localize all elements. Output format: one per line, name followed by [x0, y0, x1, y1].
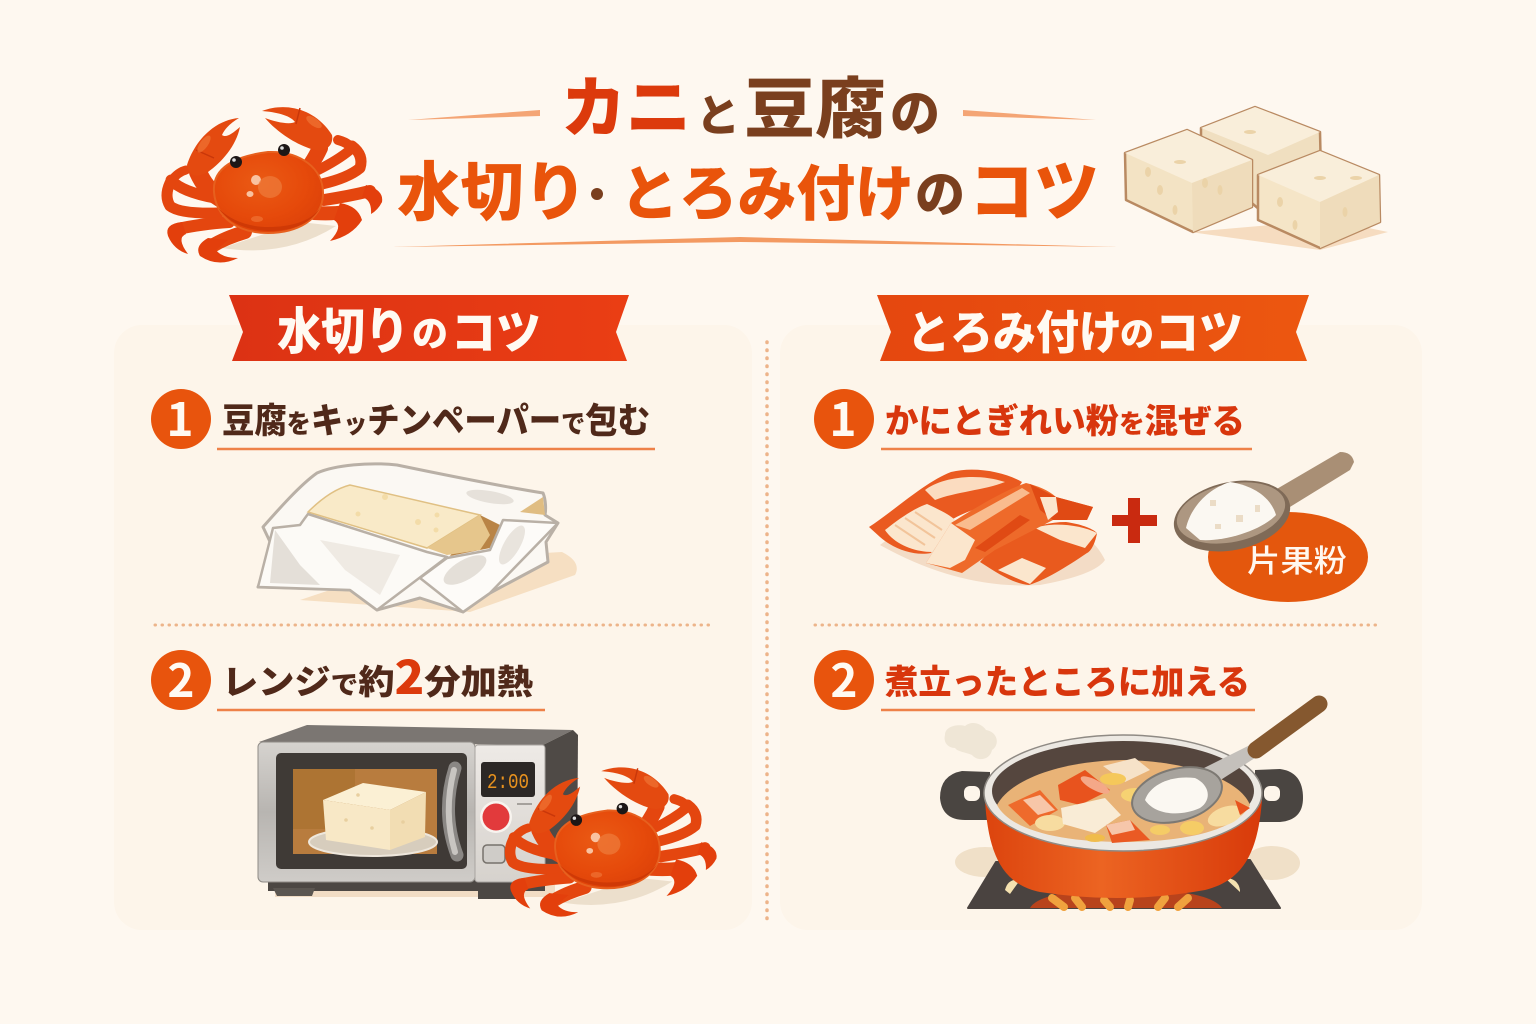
- microwave timer display: 2:00: [487, 772, 529, 795]
- step 2 water: heading: 2: [167, 645, 195, 711]
- banner: water draining: の: [412, 305, 448, 357]
- potato starch label badge: [1208, 512, 1368, 602]
- step 2 thicken: heading: [814, 645, 1255, 711]
- title line 2: とろみ付け: [620, 146, 914, 233]
- illustration: crab meat: [869, 470, 1105, 586]
- title: [392, 55, 1118, 247]
- banner: thickening: とろみ付け: [907, 297, 1122, 363]
- banner: water draining: [229, 292, 629, 364]
- step 1 thicken: heading: かにとぎれい粉を混ぜる: [885, 394, 1245, 443]
- icon: crab beside microwave: [510, 767, 717, 917]
- icon: tofu cubes: [1125, 107, 1388, 250]
- step 2 thicken: heading: 煮立ったところに加える: [885, 655, 1250, 704]
- banner: thickening: コツ: [1155, 297, 1243, 363]
- panel: water draining: [114, 325, 752, 930]
- steam puff: [945, 723, 997, 759]
- banner: thickening: [877, 295, 1309, 363]
- step 1 thicken: heading: [814, 384, 1252, 450]
- gas burner: [968, 860, 1280, 908]
- step 1 thicken: heading: 1: [829, 384, 857, 450]
- title line 1: の: [890, 74, 940, 146]
- illustration: tofu wrapped in paper: [258, 464, 577, 612]
- banner: water draining: 水切り: [277, 292, 409, 364]
- step 1 water: heading: 1: [166, 384, 194, 450]
- icon: crab top left: [167, 107, 382, 263]
- title line 2: [397, 139, 1099, 235]
- banner: thickening: の: [1120, 307, 1154, 356]
- step 2 water: heading: レンジ で約2分加熱: [222, 642, 533, 708]
- step 1 water: heading: 豆腐をキッチンペーパーで包む: [222, 393, 650, 444]
- microwave timer display: [481, 762, 535, 797]
- panel: thickening: [780, 325, 1422, 930]
- potato starch label badge: 片果粉: [1247, 536, 1347, 581]
- illustration: spoon of starch: [1167, 452, 1354, 562]
- step 1 water: heading: [151, 384, 655, 450]
- icon: plus sign: [1112, 498, 1157, 543]
- title line 2: コツ: [969, 139, 1099, 235]
- title line 2: 水切り: [397, 142, 587, 234]
- soup: [997, 760, 1250, 842]
- title line 1: カニ: [561, 55, 691, 151]
- step 2 thicken: heading: 2: [830, 645, 858, 711]
- illustration: pot on burner: [940, 704, 1319, 908]
- spoon with starch: [1126, 704, 1319, 832]
- title line 1: 豆腐: [744, 56, 886, 152]
- banner: water draining: コツ: [451, 297, 541, 363]
- illustration: microwave with tofu: [258, 725, 578, 899]
- pot body: [985, 800, 1262, 898]
- title line 2: の: [915, 155, 965, 227]
- title line 1: と: [696, 80, 740, 144]
- title line 1: [561, 55, 940, 152]
- pot handles: [940, 771, 990, 820]
